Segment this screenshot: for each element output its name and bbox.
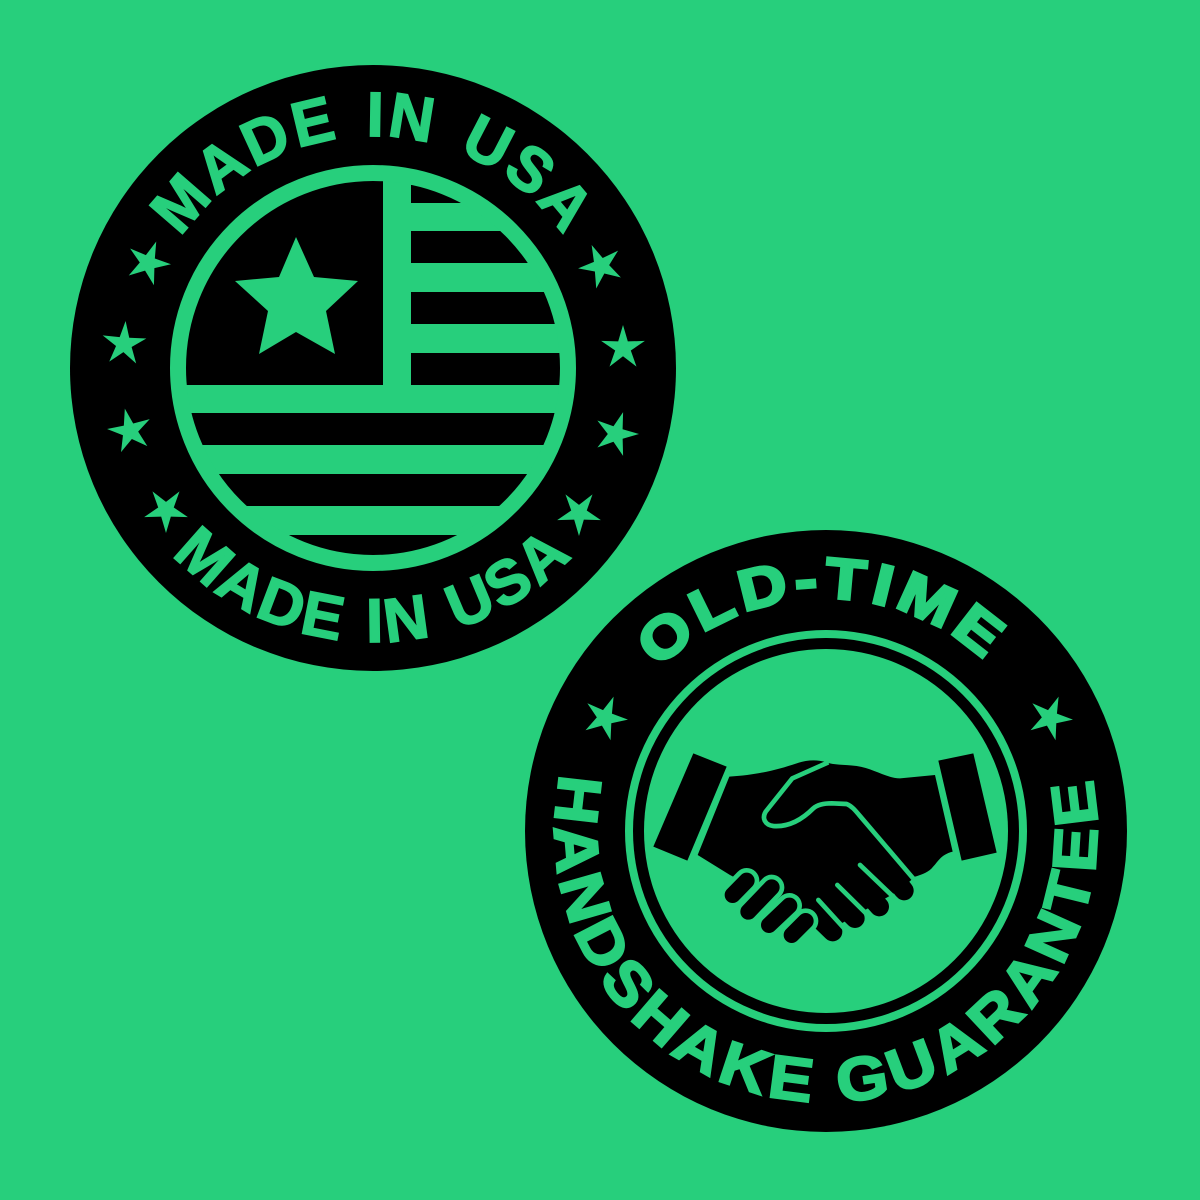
badge: Old-Time Handshake Guarantee (525, 530, 1127, 1132)
bottom curved text: MADE IN USA (173, 524, 572, 644)
badge: Made in USA (70, 65, 676, 671)
badge disc (70, 65, 676, 671)
infographic canvas (70, 65, 1127, 1132)
double ring (625, 630, 1027, 1032)
stars (578, 688, 1079, 743)
ring of stars (101, 234, 645, 541)
top curved text: OLD-TIME (640, 556, 1008, 660)
bottom curved text: HANDSHAKE GUARANTEE (552, 776, 1099, 1104)
icon: handshake (653, 753, 997, 935)
flag emblem (186, 181, 560, 535)
ring around flag (178, 173, 568, 563)
top curved text: MADE IN USA (148, 92, 588, 235)
flag star (235, 237, 358, 354)
badge disc (525, 530, 1127, 1132)
